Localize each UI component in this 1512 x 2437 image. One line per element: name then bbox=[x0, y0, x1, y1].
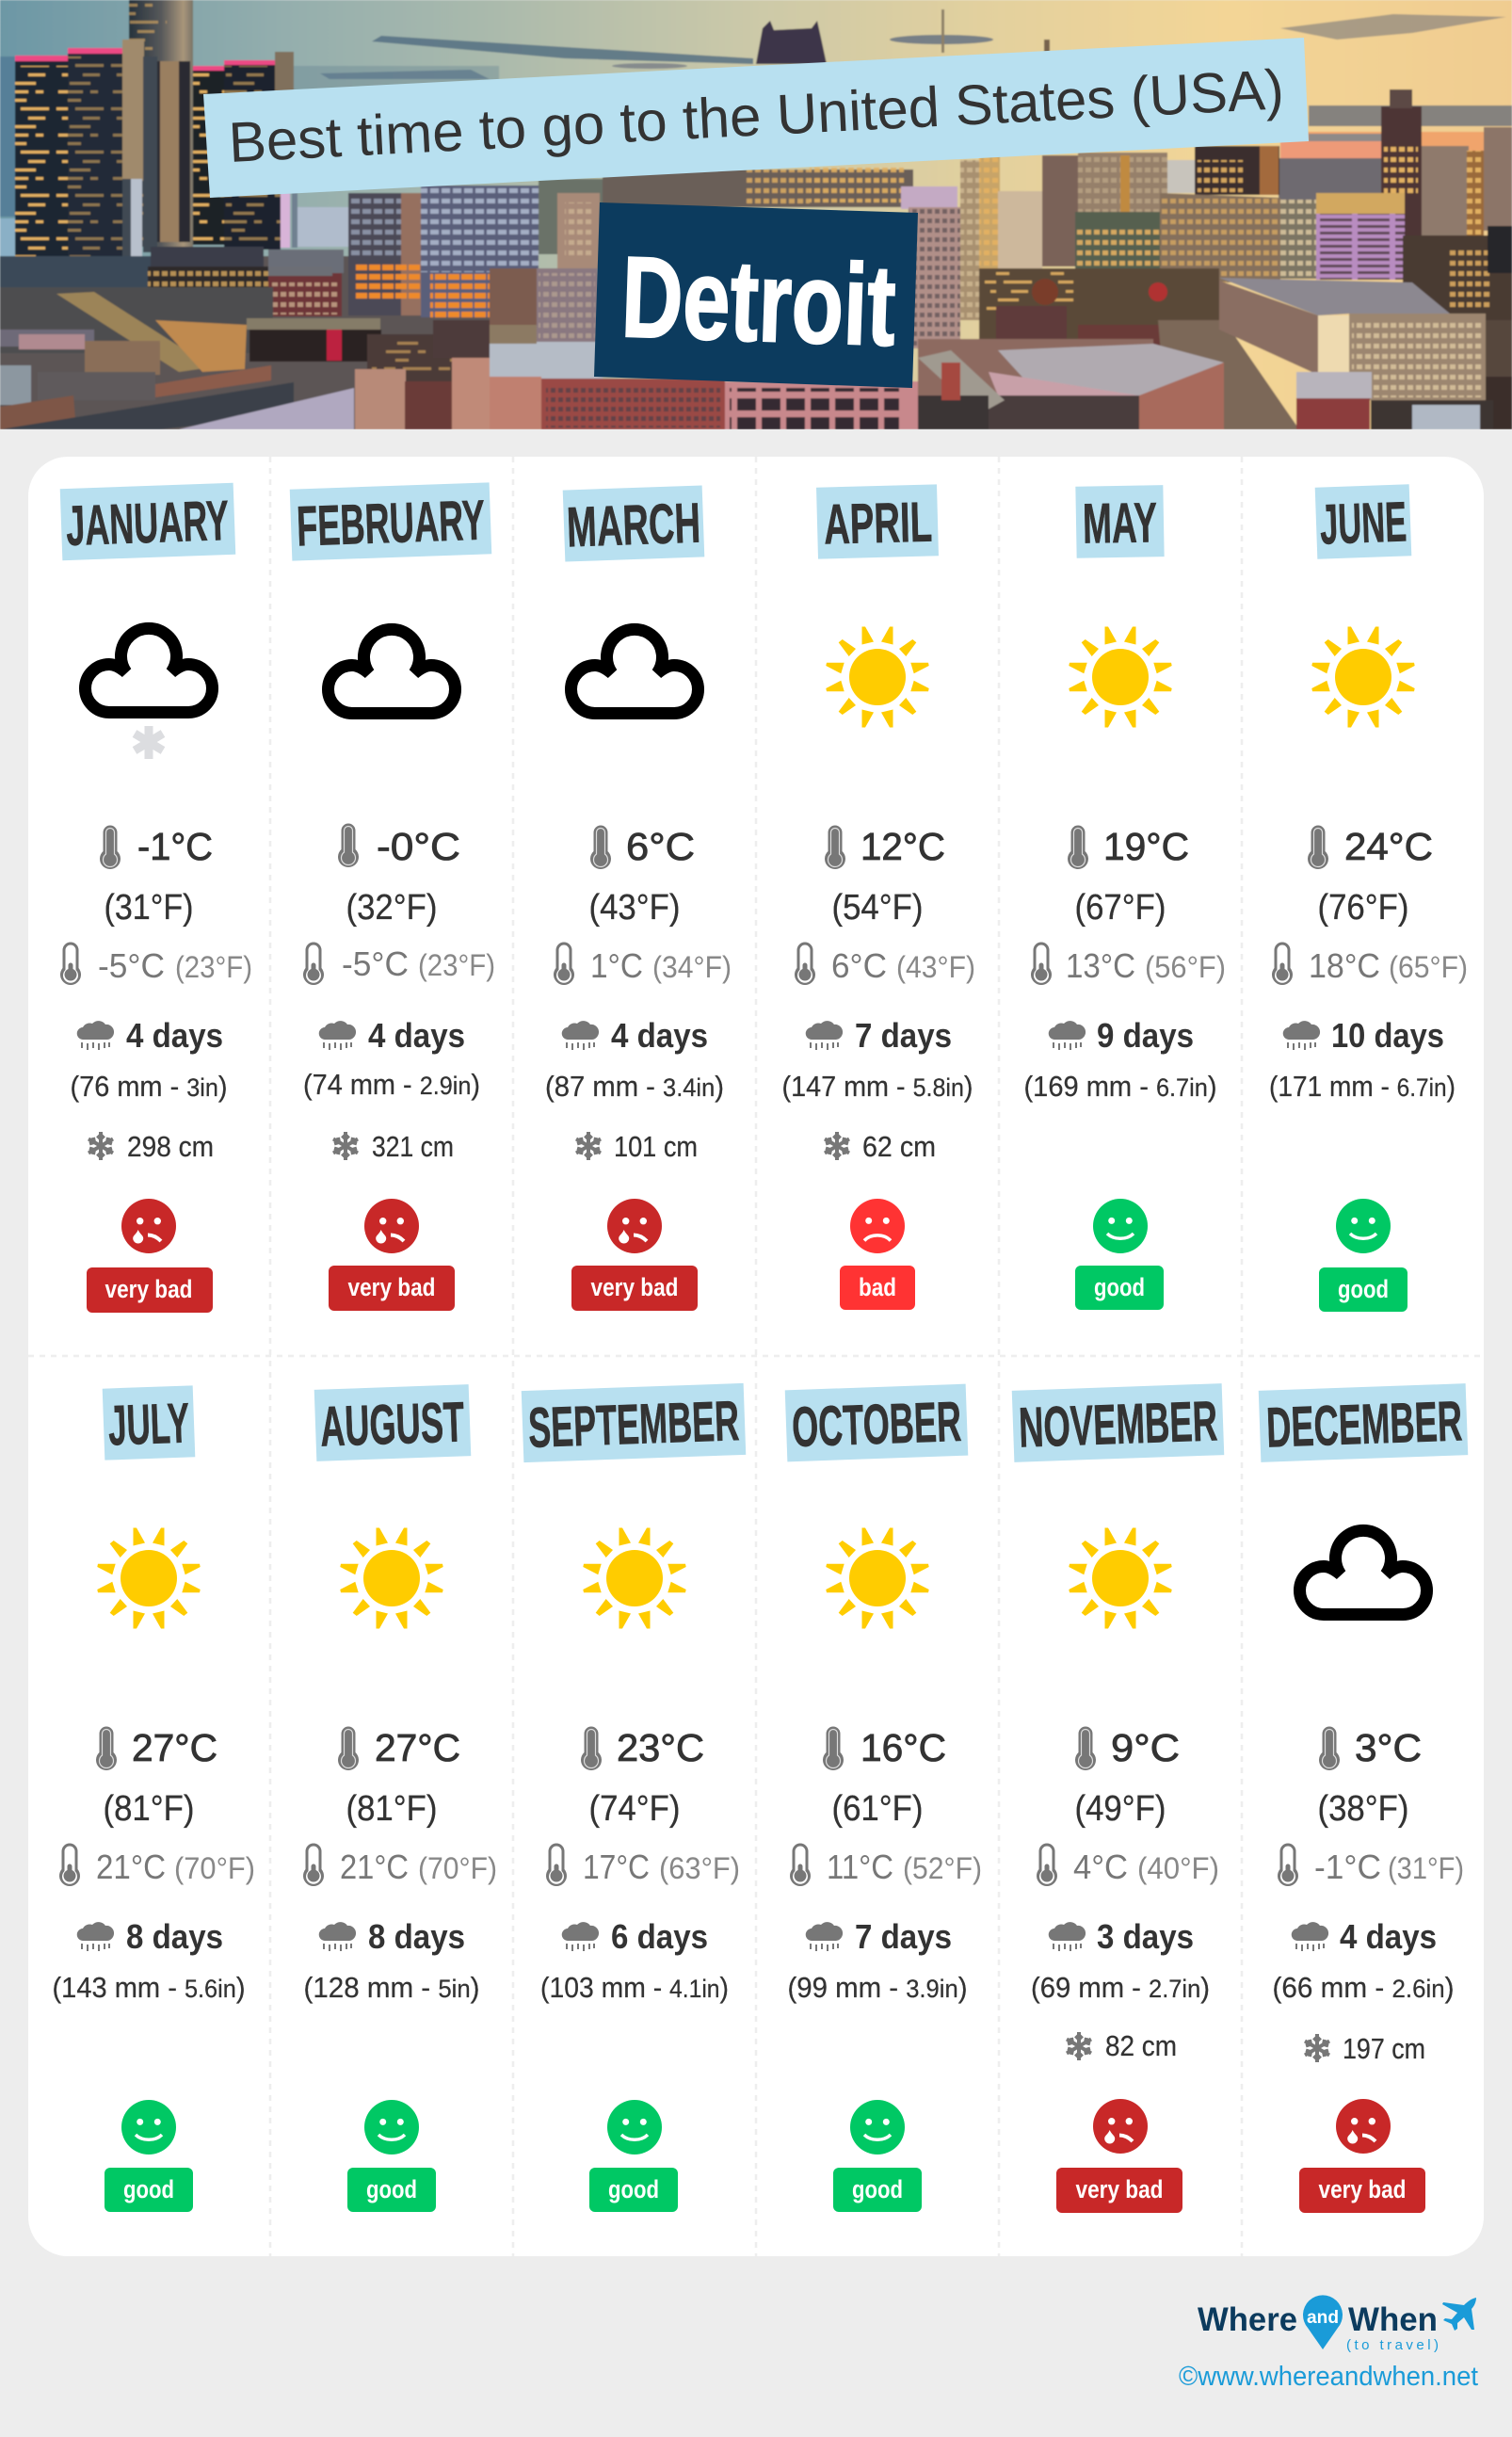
city name: Detroit bbox=[619, 233, 897, 370]
month heading: October bbox=[785, 1384, 968, 1461]
copyright URL: ©www.whereandwhen.net bbox=[1179, 2362, 1478, 2392]
icon: happy face bbox=[607, 2100, 662, 2155]
high temperature C: 27°C bbox=[375, 1726, 460, 1769]
icon: rain cloud bbox=[319, 1021, 356, 1050]
rating badge: very bad bbox=[87, 1267, 213, 1313]
month heading: July bbox=[103, 1385, 195, 1461]
rating badge: good bbox=[589, 2168, 678, 2212]
icon: thermometer low bbox=[790, 1844, 811, 1886]
panel: July bbox=[53, 1385, 255, 2212]
header photo: Detroit skyline at sunset bbox=[0, 0, 1512, 429]
rating badge: good: good bbox=[1338, 1275, 1389, 1303]
icon: thermometer low bbox=[303, 1844, 324, 1886]
logo: Where and When: Where bbox=[1198, 2301, 1297, 2338]
rating badge: very bad bbox=[1299, 2168, 1425, 2213]
snowfall: 62 cm bbox=[862, 1130, 936, 1163]
icon: sun bbox=[340, 1527, 443, 1629]
icon: rain cloud bbox=[1283, 1021, 1320, 1050]
icon: snowflake bbox=[825, 1132, 849, 1160]
high temperature F: (31°F) bbox=[104, 888, 194, 928]
rating badge: good: good bbox=[852, 2175, 903, 2203]
month heading: April bbox=[816, 484, 939, 559]
snowfall: 298 cm bbox=[127, 1130, 214, 1163]
icon: thermometer high bbox=[338, 823, 359, 867]
low temperature C: -1°C bbox=[1314, 1848, 1381, 1886]
rating badge: very bad bbox=[1056, 2168, 1182, 2213]
month heading: September: SEPTEMBER bbox=[527, 1389, 740, 1460]
low temperature F: (70°F) bbox=[174, 1851, 255, 1885]
icon: thermometer high bbox=[1308, 825, 1328, 869]
icon: snowflake bbox=[1067, 2032, 1091, 2060]
icon: happy face bbox=[364, 2100, 419, 2155]
high temperature F: (61°F) bbox=[832, 1789, 923, 1829]
icon: sad face bbox=[850, 1199, 905, 1253]
low temperature C: 17°C bbox=[583, 1848, 650, 1886]
high temperature F: (76°F) bbox=[1318, 888, 1408, 928]
icon: snowflake bbox=[88, 1132, 113, 1160]
high temperature F: (32°F) bbox=[346, 888, 437, 928]
rating badge: good bbox=[105, 2168, 193, 2212]
icon: thermometer high bbox=[823, 1727, 844, 1770]
rainy days: 4 days bbox=[1340, 1917, 1437, 1956]
rainfall: (103 mm - 4.1in) bbox=[540, 1971, 729, 2004]
month heading: September bbox=[522, 1383, 746, 1462]
month heading: August: AUGUST bbox=[319, 1390, 465, 1459]
low temperature F: (43°F) bbox=[896, 950, 975, 984]
icon: thermometer high bbox=[581, 1727, 602, 1770]
icon: cloud bbox=[328, 629, 456, 714]
month heading: May: MAY bbox=[1082, 491, 1158, 556]
icon: thermometer high bbox=[1075, 1727, 1096, 1770]
high temperature F: (43°F) bbox=[589, 888, 680, 928]
low temperature C: 11°C bbox=[827, 1848, 893, 1886]
low temperature F: (52°F) bbox=[903, 1851, 982, 1885]
title text: Best time to go to the United States (USA) bbox=[227, 57, 1285, 174]
rating badge: very bad: very bad bbox=[105, 1275, 192, 1303]
month heading: August bbox=[314, 1384, 471, 1461]
panel: May bbox=[1024, 485, 1226, 1310]
panel: November bbox=[1012, 1383, 1224, 2213]
rainfall: (143 mm - 5.6in) bbox=[53, 1971, 245, 2004]
icon: crying face bbox=[364, 1199, 419, 1253]
icon: happy face bbox=[850, 2100, 905, 2155]
rainy days: 3 days bbox=[1097, 1917, 1194, 1956]
high temperature C: 19°C bbox=[1103, 825, 1189, 868]
high temperature F: (49°F) bbox=[1075, 1789, 1166, 1829]
month heading: February: FEBRUARY bbox=[296, 489, 486, 557]
rainfall: (66 mm - 2.6in) bbox=[1273, 1971, 1454, 2004]
rainy days: 9 days bbox=[1097, 1016, 1194, 1055]
rating badge: very bad: very bad bbox=[1318, 2175, 1407, 2203]
icon: thermometer high bbox=[100, 825, 121, 869]
low temperature C: 13°C bbox=[1066, 946, 1135, 985]
title banner bbox=[203, 38, 1309, 198]
low temperature F: (23°F) bbox=[175, 950, 252, 984]
icon: sun bbox=[1069, 627, 1172, 727]
panel: December bbox=[1259, 1383, 1468, 2213]
panel: October bbox=[785, 1384, 982, 2212]
icon: cloud with snow bbox=[85, 628, 213, 759]
rating badge: very bad: very bad bbox=[1075, 2175, 1164, 2203]
high temperature C: 23°C bbox=[617, 1726, 704, 1769]
icon: cloud bbox=[571, 629, 699, 714]
panel: September bbox=[522, 1383, 746, 2212]
icon: sun bbox=[1311, 627, 1415, 727]
low temperature F: (65°F) bbox=[1389, 950, 1468, 984]
high temperature F: (54°F) bbox=[832, 888, 923, 928]
panel: August bbox=[303, 1384, 497, 2212]
rainfall: (74 mm - 2.9in) bbox=[303, 1068, 480, 1101]
high temperature C: -1°C bbox=[137, 825, 213, 868]
icon: sun bbox=[1069, 1527, 1172, 1629]
logo: Where and When: (to travel) bbox=[1346, 2337, 1439, 2353]
month heading: June: JUNE bbox=[1319, 490, 1407, 557]
icon: thermometer high bbox=[1068, 825, 1088, 869]
high temperature C: 3°C bbox=[1355, 1726, 1422, 1769]
icon: thermometer high bbox=[590, 825, 611, 869]
low temperature C: 18°C bbox=[1309, 946, 1380, 985]
panel: January bbox=[60, 483, 252, 1313]
icon: thermometer low bbox=[554, 942, 574, 985]
month heading: February bbox=[290, 482, 491, 561]
rating badge: very bad bbox=[571, 1266, 698, 1311]
icon: crying face bbox=[121, 1199, 176, 1253]
rating badge: very bad: very bad bbox=[348, 1273, 435, 1301]
icon: thermometer low bbox=[1278, 1844, 1298, 1886]
rainfall: (99 mm - 3.9in) bbox=[787, 1971, 968, 2004]
month heading: October: OCTOBER bbox=[791, 1390, 962, 1459]
rating badge: good bbox=[347, 2168, 436, 2212]
icon: snowflake bbox=[576, 1132, 601, 1160]
low temperature C: 4°C bbox=[1073, 1848, 1128, 1886]
high temperature C: -0°C bbox=[377, 825, 460, 868]
snowfall: 101 cm bbox=[614, 1130, 698, 1163]
rainfall: (76 mm - 3in) bbox=[71, 1070, 228, 1103]
month heading: January bbox=[60, 483, 235, 560]
logo: Where and When: and bbox=[1307, 2308, 1339, 2328]
icon: sun bbox=[826, 1527, 929, 1629]
icon: sun bbox=[826, 627, 929, 727]
icon: thermometer low bbox=[795, 942, 815, 985]
high temperature C: 6°C bbox=[626, 825, 695, 868]
rating badge: good: good bbox=[1094, 1273, 1145, 1301]
month heading: November bbox=[1012, 1383, 1224, 1462]
rainfall: (171 mm - 6.7in) bbox=[1269, 1070, 1456, 1103]
icon: cloud bbox=[1299, 1530, 1427, 1614]
icon: sun bbox=[583, 1527, 686, 1629]
icon: rain cloud bbox=[1292, 1922, 1328, 1951]
month heading: May bbox=[1075, 485, 1165, 558]
icon: rain cloud bbox=[77, 1922, 114, 1951]
icon: snowflake bbox=[1305, 2034, 1329, 2062]
icon: thermometer high bbox=[96, 1727, 117, 1770]
low temperature C: 6°C bbox=[831, 946, 887, 985]
icon: thermometer low bbox=[1037, 1844, 1057, 1886]
icon: thermometer high bbox=[1319, 1727, 1340, 1770]
logo: Where and When: When bbox=[1348, 2301, 1438, 2338]
rainy days: 10 days bbox=[1331, 1016, 1444, 1055]
rainy days: 8 days bbox=[368, 1917, 465, 1956]
icon: rain cloud bbox=[1049, 1922, 1086, 1951]
high temperature C: 16°C bbox=[861, 1726, 946, 1769]
low temperature C: 21°C bbox=[96, 1848, 166, 1886]
icon: crying face bbox=[1336, 2099, 1391, 2154]
month heading: July: JULY bbox=[107, 1392, 190, 1457]
rainfall: (169 mm - 6.7in) bbox=[1024, 1070, 1216, 1103]
icon: thermometer low bbox=[303, 942, 324, 985]
high temperature F: (74°F) bbox=[589, 1789, 680, 1829]
rating badge: very bad bbox=[329, 1266, 455, 1311]
panel: April bbox=[781, 484, 975, 1310]
icon: sun bbox=[97, 1527, 201, 1629]
high temperature C: 24°C bbox=[1344, 825, 1433, 868]
snowfall: 82 cm bbox=[1105, 2029, 1177, 2062]
icon: rain cloud bbox=[562, 1021, 599, 1050]
icon: thermometer high bbox=[825, 825, 845, 869]
icon: happy face bbox=[121, 2100, 176, 2155]
rainy days: 4 days bbox=[368, 1016, 465, 1055]
icon: rain cloud bbox=[562, 1922, 599, 1951]
snowfall: 197 cm bbox=[1343, 2032, 1425, 2065]
rainy days: 4 days bbox=[126, 1016, 223, 1055]
icon: happy face bbox=[1336, 1199, 1391, 1253]
logo: Where and When bbox=[1198, 2295, 1476, 2353]
panel: February bbox=[290, 482, 495, 1311]
icon: rain cloud bbox=[77, 1021, 114, 1050]
high temperature F: (67°F) bbox=[1075, 888, 1166, 928]
rating badge: very bad: very bad bbox=[591, 1273, 678, 1301]
rainy days: 6 days bbox=[611, 1917, 708, 1956]
rating badge: good bbox=[1319, 1267, 1407, 1312]
low temperature F: (56°F) bbox=[1145, 950, 1226, 984]
rainy days: 7 days bbox=[855, 1016, 952, 1055]
icon: rain cloud bbox=[319, 1922, 356, 1951]
rainfall: (147 mm - 5.8in) bbox=[781, 1070, 973, 1103]
high temperature F: (81°F) bbox=[104, 1789, 194, 1829]
panel: March bbox=[545, 485, 732, 1311]
month heading: April: APRIL bbox=[823, 490, 933, 556]
low temperature C: -5°C bbox=[98, 946, 165, 985]
high temperature C: 27°C bbox=[132, 1726, 217, 1769]
high temperature F: (38°F) bbox=[1318, 1789, 1408, 1829]
rating badge: good bbox=[1075, 1266, 1164, 1310]
low temperature C: 21°C bbox=[340, 1848, 409, 1886]
low temperature F: (63°F) bbox=[659, 1851, 740, 1885]
panel: months card bbox=[28, 457, 1484, 2256]
low temperature F: (70°F) bbox=[418, 1851, 497, 1885]
high temperature C: 9°C bbox=[1111, 1726, 1180, 1769]
month heading: January: JANUARY bbox=[65, 489, 230, 557]
low temperature C: 1°C bbox=[590, 946, 643, 985]
panel: June bbox=[1269, 484, 1468, 1312]
icon: thermometer high bbox=[338, 1727, 359, 1770]
rainy days: 7 days bbox=[855, 1917, 952, 1956]
rating badge: good: good bbox=[123, 2175, 174, 2203]
rainy days: 4 days bbox=[611, 1016, 708, 1055]
low temperature F: (31°F) bbox=[1388, 1851, 1464, 1885]
low temperature F: (34°F) bbox=[652, 950, 732, 984]
rainfall: (69 mm - 2.7in) bbox=[1031, 1971, 1210, 2004]
icon: rain cloud bbox=[1049, 1021, 1086, 1050]
low temperature C: -5°C bbox=[342, 944, 409, 983]
rating badge: good: good bbox=[366, 2175, 417, 2203]
icon: rain cloud bbox=[806, 1021, 843, 1050]
rating badge: good: good bbox=[608, 2175, 659, 2203]
icon: rain cloud bbox=[806, 1922, 843, 1951]
rating badge: good bbox=[833, 2168, 922, 2212]
icon: happy face bbox=[1093, 1199, 1148, 1253]
low temperature F: (23°F) bbox=[418, 948, 495, 982]
icon: thermometer low bbox=[1031, 942, 1052, 985]
icon: thermometer low bbox=[546, 1844, 567, 1886]
rainy days: 8 days bbox=[126, 1917, 223, 1956]
icon: crying face bbox=[1093, 2099, 1148, 2154]
high temperature F: (81°F) bbox=[346, 1789, 437, 1829]
icon: crying face bbox=[607, 1199, 662, 1253]
icon: thermometer low bbox=[60, 942, 81, 985]
rating badge: bad: bad bbox=[859, 1273, 896, 1301]
rating badge: bad bbox=[840, 1266, 915, 1310]
month heading: November: NOVEMBER bbox=[1018, 1389, 1218, 1460]
rainfall: (128 mm - 5in) bbox=[303, 1971, 480, 2004]
month heading: June bbox=[1315, 484, 1411, 559]
rainfall: (87 mm - 3.4in) bbox=[545, 1070, 724, 1103]
month heading: March: MARCH bbox=[566, 492, 701, 558]
icon: thermometer low bbox=[1272, 942, 1293, 985]
low temperature F: (40°F) bbox=[1137, 1851, 1219, 1885]
icon: snowflake bbox=[333, 1132, 358, 1160]
month heading: March bbox=[563, 485, 704, 562]
city banner: Detroit bbox=[594, 202, 918, 388]
high temperature C: 12°C bbox=[861, 825, 945, 868]
icon: thermometer low bbox=[59, 1844, 80, 1886]
snowfall: 321 cm bbox=[372, 1130, 454, 1163]
